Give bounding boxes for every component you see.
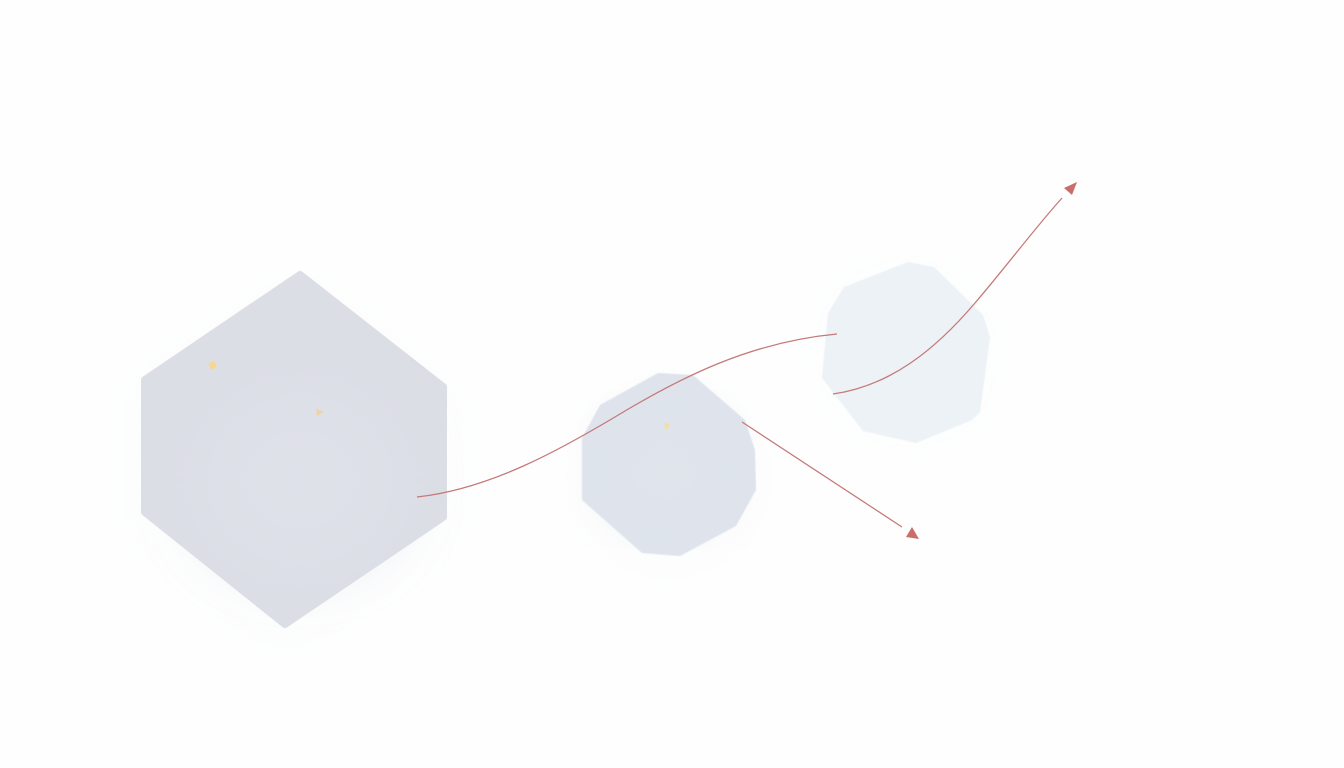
icon: amber marker bbox=[664, 423, 670, 430]
panel: large hexagon bbox=[141, 275, 447, 642]
panel: medium octagon bbox=[582, 373, 756, 566]
icon: amber marker centre bbox=[316, 409, 324, 416]
arrowhead: lower right bbox=[906, 527, 919, 539]
icon: amber marker upper left bbox=[209, 361, 217, 370]
panel: small polygon bbox=[822, 262, 990, 443]
arrow: curve rising to upper right bbox=[833, 182, 1077, 394]
arrow: straight line to lower right bbox=[742, 422, 919, 539]
arrow: curve from hexagon to small polygon bbox=[417, 334, 837, 497]
arrowhead: upper right bbox=[1064, 182, 1077, 195]
